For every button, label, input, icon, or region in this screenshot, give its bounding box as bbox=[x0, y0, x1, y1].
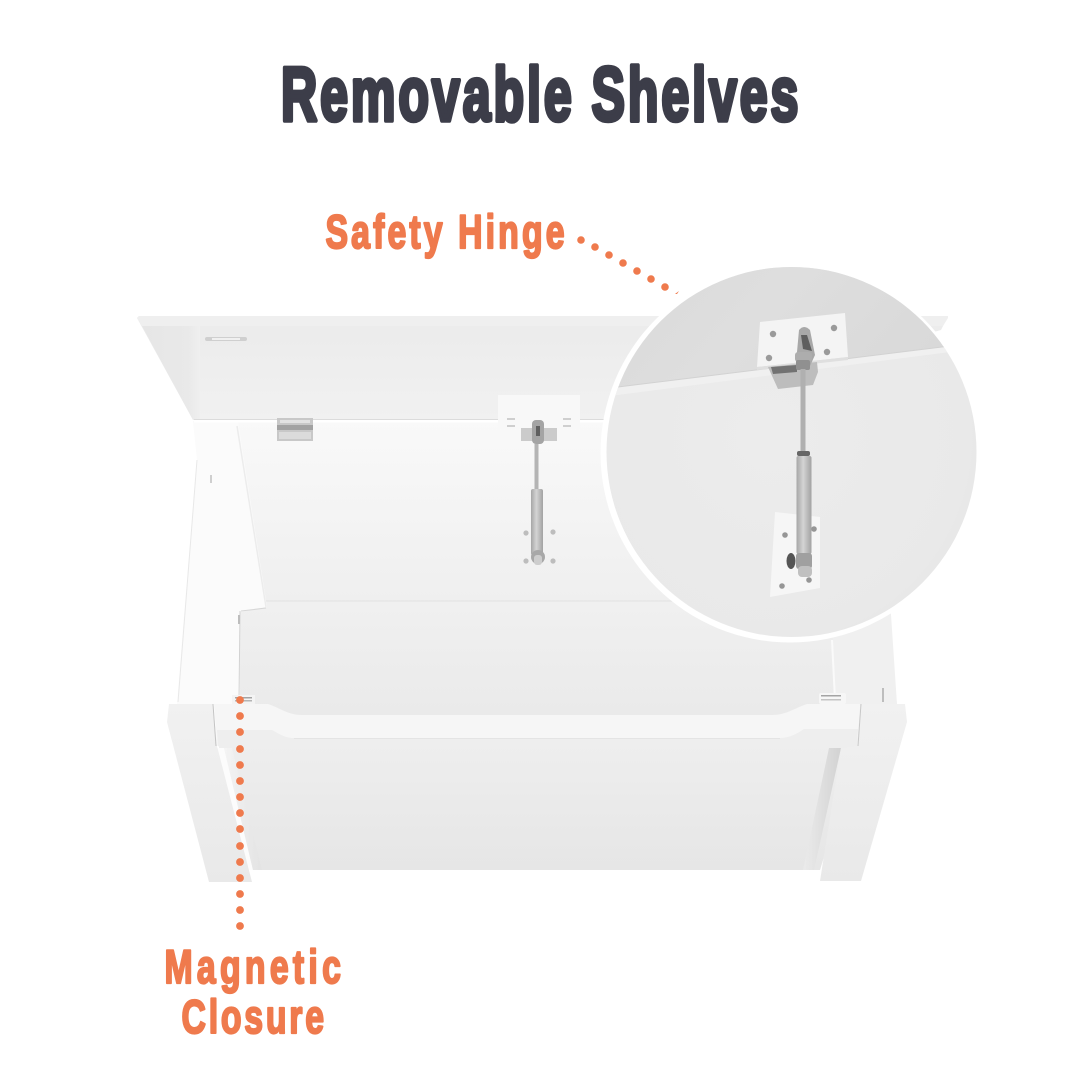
interior floor bbox=[238, 601, 835, 716]
dotted leader: safety hinge bbox=[577, 236, 679, 294]
interior back wall bbox=[193, 421, 835, 601]
left magnetic catch bbox=[232, 695, 255, 705]
lid seam highlight bbox=[194, 419, 624, 422]
safety hinge strut bbox=[498, 395, 580, 565]
front top rail bbox=[214, 704, 860, 746]
piston rod bbox=[800, 369, 806, 453]
safety hinge detail circle bbox=[600, 260, 980, 650]
right front post bbox=[820, 704, 907, 881]
title: Removable Shelves bbox=[281, 52, 798, 137]
piston cylinder bbox=[796, 451, 812, 577]
open lid bbox=[137, 316, 948, 420]
flat hinge bbox=[277, 418, 313, 441]
bottom mounting plate bbox=[770, 512, 820, 597]
left front post bbox=[167, 704, 252, 882]
front panel bbox=[217, 740, 860, 870]
label: magnetic closure: Magnetic bbox=[164, 941, 341, 993]
label: magnetic closure bbox=[164, 941, 341, 1043]
detail lid underside bbox=[618, 267, 944, 386]
right side wall bbox=[832, 600, 897, 704]
detail lower panel bbox=[606, 352, 976, 637]
storage chest product illustration bbox=[137, 316, 948, 882]
hinge leaf bbox=[768, 362, 818, 389]
lid edge highlight bbox=[618, 348, 944, 388]
circle white ring bbox=[600, 264, 980, 642]
left side wall bbox=[177, 422, 267, 704]
label: magnetic closure: Closure bbox=[182, 991, 324, 1043]
top mounting plate bbox=[757, 313, 848, 370]
label: safety hinge: Safety Hinge bbox=[326, 206, 565, 258]
strut clamp bbox=[795, 327, 815, 370]
dotted leader: magnetic closure bbox=[236, 696, 244, 930]
right magnetic catch bbox=[819, 693, 846, 704]
